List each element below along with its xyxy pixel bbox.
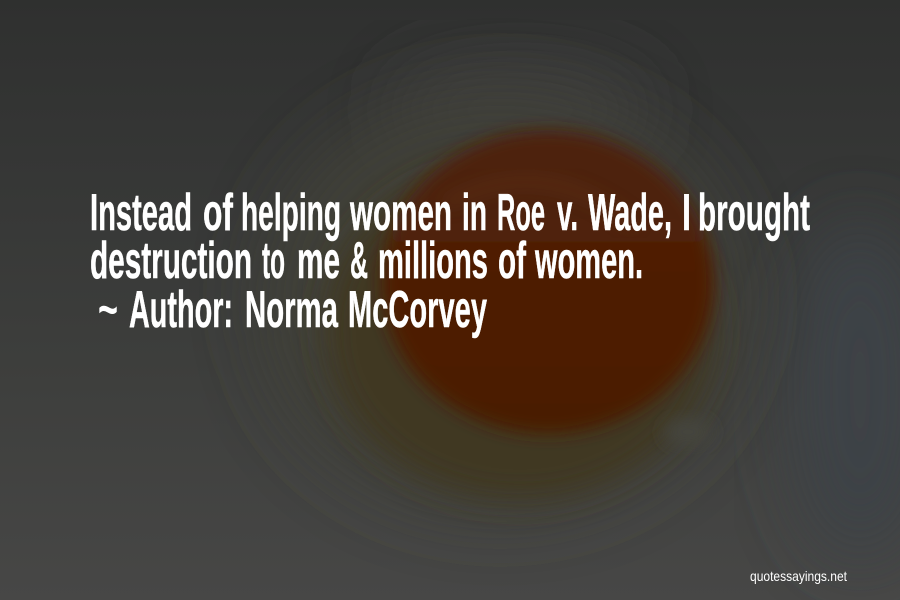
- author line: McCorvey: [348, 281, 487, 339]
- quote line 1: in: [462, 184, 487, 242]
- author line: Author:: [129, 281, 233, 339]
- quote line 1: [90, 184, 810, 242]
- quote line 1: women: [349, 184, 452, 242]
- quote line 2: to: [262, 232, 285, 290]
- author line: ~: [98, 281, 118, 339]
- quote line 1: of: [203, 184, 233, 242]
- watermark: quotessayings.net: [750, 568, 847, 584]
- author line: [98, 281, 487, 339]
- quote line 2: women.: [534, 232, 643, 290]
- quote line 2: me: [297, 232, 340, 290]
- quote line 1: Roe: [497, 184, 545, 242]
- quote line 2: millions: [378, 232, 488, 290]
- quote line 2: destruction: [90, 232, 252, 290]
- quote line 1: Wade,: [588, 184, 672, 242]
- quote text: [90, 184, 810, 339]
- quote line 1: I: [682, 184, 691, 242]
- quote line 2: [90, 232, 643, 290]
- quote line 2: &: [350, 232, 368, 290]
- quote line 1: helping: [241, 184, 341, 242]
- author line: Norma: [245, 281, 339, 339]
- quote line 2: of: [498, 232, 526, 290]
- quote line 1: v.: [557, 184, 578, 242]
- quote line 1: brought: [698, 184, 810, 242]
- quote line 1: Instead: [90, 184, 192, 242]
